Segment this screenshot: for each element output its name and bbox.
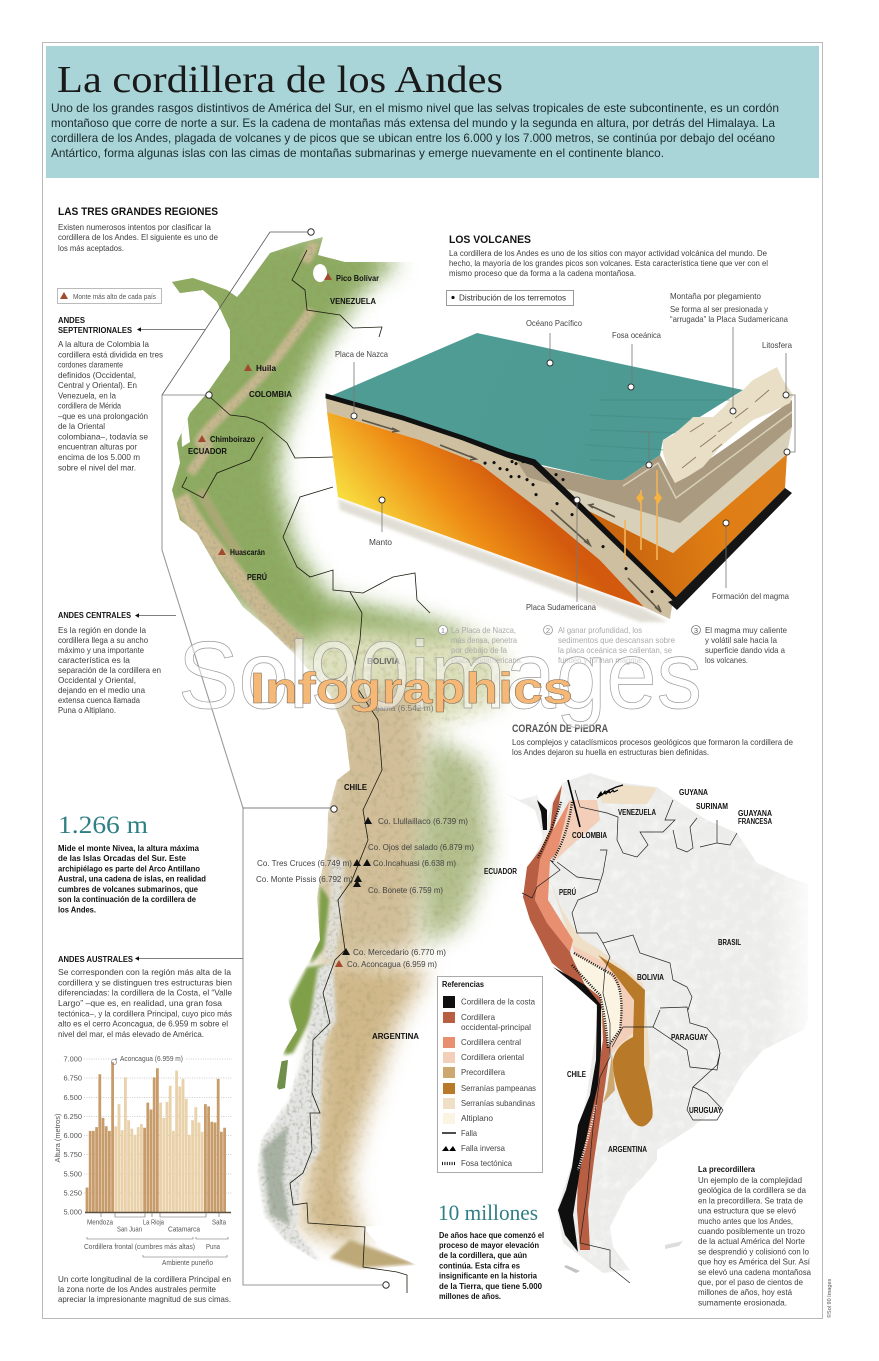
- diagram labels: Montaña por plegamiento: [670, 291, 761, 301]
- callout: 1.266 m: 1.266 m: [58, 812, 149, 839]
- text: andes centrales: Occidental y Oriental,: [58, 675, 136, 685]
- text: corazon de piedra: los Andes dejaron su huella en estructuras bien definidas.: [512, 747, 709, 757]
- text: andes australes: tectónica–, y la cordillera Principal, cuyo pico más: [58, 1008, 232, 1018]
- map labels and peaks: VENEZUELA: [330, 297, 376, 306]
- diagram labels: Se forma al ser presionada y: [670, 304, 769, 314]
- text: la precordillera: geológica de la cordillera se da: [698, 1185, 806, 1195]
- map labels and peaks: Co.Incahuasi (6.638 m): [373, 858, 456, 868]
- text: andes centrales: Puna o Altiplano.: [58, 705, 116, 715]
- connector brackets: [162, 229, 389, 1288]
- text: las tres grandes regiones: LAS TRES GRANDES REGIONES: [58, 206, 218, 218]
- text: andes australes: cordillera y se distinguen tres estructuras bien: [58, 977, 232, 987]
- map labels: ECUADOR: [484, 867, 517, 876]
- chart gridlines and axis labels: 6.000: [64, 1131, 82, 1140]
- block diagram: subduction: [326, 291, 795, 622]
- watermark: Sol90images: [178, 622, 702, 729]
- chart gridlines and axis labels: [53, 1054, 232, 1216]
- text: andes australes: diferenciadas: la cordillera de la Costa, el “Valle: [58, 988, 232, 998]
- note 3: superficie dando vida a: [705, 645, 785, 655]
- text: la precordillera: millones de años, hoy está: [698, 1287, 792, 1297]
- legend: referencias: Serranías pampeanas: [461, 1083, 536, 1093]
- legend: referencias: Cordillera central: [461, 1037, 521, 1047]
- map labels: FRANCESA: [738, 817, 772, 826]
- text: andes septentrionales: [58, 315, 205, 472]
- map labels and peaks: PERÚ: [247, 573, 267, 582]
- map labels and peaks: Co. Mercedario (6.770 m): [353, 947, 446, 957]
- earthquake dots: [483, 460, 654, 593]
- text: andes centrales: [58, 610, 176, 715]
- legend: earthquakes: Distribución de los terremotos: [459, 292, 566, 302]
- map labels and peaks: Co. Tres Cruces (6.749 m): [257, 858, 352, 868]
- legend: referencias: Precordillera: [461, 1067, 505, 1077]
- faults and trenches: [538, 780, 623, 1170]
- text: los volcanes: LOS VOLCANES: [449, 234, 531, 246]
- legend: referencias: Cordillera de la costa: [461, 996, 535, 1006]
- text: andes septentrionales: SEPTENTRIONALES: [58, 325, 132, 335]
- chart caption: apreciar la impresionante magnitud de sus cimas.: [58, 1294, 231, 1304]
- text: la precordillera: Un ejemplo de la complejidad: [698, 1175, 802, 1185]
- text: las tres grandes regiones: Existen numerosos intentos por clasificar la: [58, 222, 211, 232]
- text: las tres grandes regiones: [58, 206, 218, 253]
- plate arrows: [362, 420, 661, 612]
- text: andes centrales: Es la región en donde la: [58, 625, 146, 635]
- annotation: Aconcagua: Aconcagua (6.959 m): [120, 1054, 183, 1063]
- ocean surface: [326, 333, 743, 480]
- black subducting slab: [326, 394, 676, 600]
- map labels and peaks: Chimboirazo: [210, 435, 255, 444]
- chart region labels: San Juan: [117, 1224, 142, 1234]
- text: la precordillera: que, por el paso de cientos de: [698, 1277, 803, 1287]
- legend: referencias: [438, 976, 542, 1172]
- map labels: [484, 788, 772, 1154]
- text: andes australes: alto es el cerro Aconcagua, de 6.959 m sobre el: [58, 1019, 228, 1029]
- map: south america geology: [484, 773, 808, 1283]
- text: andes septentrionales: A la altura de Colombia la: [58, 339, 149, 349]
- callout: 10 millones: millones de años.: [439, 1291, 501, 1301]
- map labels: COLOMBIA: [572, 831, 607, 840]
- note 1: 1: [441, 626, 445, 635]
- text: andes septentrionales: ANDES: [58, 315, 85, 325]
- chart caption: la zona norte de los Andes australes permite: [58, 1284, 216, 1294]
- map labels: PERÚ: [559, 888, 576, 897]
- header panel: [46, 46, 819, 178]
- numbered notes: [438, 625, 787, 665]
- note 2: funden y forman magma.: [558, 655, 643, 665]
- text: andes septentrionales: cordones claramente: [58, 360, 123, 370]
- text: andes australes: nivel del mar, el más elevado de América.: [58, 1029, 204, 1039]
- chart gridlines and axis labels: Altura (metros): [53, 1114, 62, 1162]
- diagram shadow: [338, 499, 668, 622]
- credit: ©Sol 90 Images: [826, 1279, 833, 1318]
- text: andes septentrionales: sobre el nivel del mar.: [58, 462, 136, 472]
- text: los volcanes: La cordillera de los Andes es uno de los sitios con mayor actividad volcánica del mundo. De: [449, 248, 767, 258]
- text: andes septentrionales: de la Oriental: [58, 421, 105, 431]
- map labels: BRASIL: [718, 938, 741, 947]
- map labels and peaks: Co. Ojos del salado (6.879 m): [368, 842, 474, 852]
- diagram labels: Océano Pacífico: [526, 318, 582, 328]
- map labels and peaks: [188, 273, 474, 1041]
- text: andes centrales: cordillera llega a su ancho: [58, 635, 148, 645]
- text: las tres grandes regiones: los más aceptados.: [58, 243, 124, 253]
- andes spine: [190, 243, 315, 473]
- text: los volcanes: [449, 234, 768, 278]
- text: andes centrales: dejando en el medio una: [58, 685, 145, 695]
- note 2: [544, 625, 675, 665]
- text: andes septentrionales: –que es una prolongación: [58, 411, 148, 421]
- geology bands: [523, 785, 657, 1252]
- text: andes centrales: característica es la: [58, 655, 130, 665]
- text: andes centrales: ANDES CENTRALES: [58, 610, 131, 620]
- diagram labels: [335, 291, 792, 612]
- chart gridlines and axis labels: 5.000: [64, 1208, 82, 1216]
- legend: highest peak: [58, 288, 162, 304]
- chart caption: [58, 1274, 231, 1304]
- callout: 10 millones: de la Tierra, que tiene 5.000: [439, 1281, 542, 1291]
- nazca plate: [326, 398, 673, 619]
- text: la precordillera: [698, 1164, 811, 1307]
- callout: 10 millones: De años hace que comenzó el: [439, 1230, 544, 1240]
- legend: highest peak: Monte más alto de cada país: [73, 292, 156, 301]
- callout: 1.266 m: [58, 812, 206, 914]
- callout: 1.266 m: de las Islas Orcadas del Sur. Este: [58, 853, 186, 863]
- note 2: la placa oceánica se calientan, se: [558, 645, 672, 655]
- map labels and peaks: Sajama (6.542 m): [367, 703, 434, 713]
- chart region labels: Salta: [212, 1218, 227, 1226]
- annotation: Aconcagua: [111, 1054, 183, 1065]
- legend: referencias: Falla: [461, 1128, 477, 1138]
- callout: 1.266 m: cumbres de volcanes submarinos, que: [58, 884, 198, 894]
- magma chamber: [573, 454, 787, 600]
- chart region labels: Catamarca: [168, 1224, 201, 1234]
- map labels: GUAYANA: [738, 809, 772, 818]
- map labels and peaks: Co. Llullaillaco (6.739 m): [378, 816, 468, 826]
- mountains: [663, 367, 793, 483]
- chart gridlines and axis labels: 5.500: [64, 1170, 82, 1178]
- magma plumes: [625, 470, 662, 560]
- text: andes septentrionales: encuentran alturas por: [58, 442, 137, 452]
- callout: 1.266 m: Mide el monte Nivea, la altura máxima: [58, 843, 199, 853]
- intro text: Uno de los grandes rasgos distintivos de América del Sur, en el mismo nivel que las selvas tropicales de este subcontinente, es un cordón: [51, 101, 779, 115]
- map labels: URUGUAY: [689, 1106, 723, 1115]
- chart region labels: La Rioja: [143, 1218, 165, 1226]
- bar chart: peak heights: [53, 1054, 232, 1267]
- text: andes centrales: separación de la cordillera en: [58, 665, 161, 675]
- intro text: [51, 101, 779, 160]
- text: la precordillera: mucho antes que los Andes,: [698, 1216, 793, 1226]
- chart region labels: Ambiente puneño: [162, 1258, 213, 1267]
- callout: 10 millones: de la cordillera, que aún: [439, 1250, 527, 1260]
- text: corazon de piedra: CORAZÓN DE PIEDRA: [512, 722, 608, 735]
- text: andes septentrionales: Central y Oriental). En: [58, 380, 137, 390]
- map labels: SURINAM: [696, 802, 728, 811]
- mantle: [327, 412, 644, 607]
- cream lithosphere: [527, 427, 792, 553]
- diagram labels: Placa Sudamericana: [526, 602, 596, 612]
- text: las tres grandes regiones: cordillera de los Andes. El siguiente es uno de: [58, 232, 218, 242]
- note 2: sedimentos que descansan sobre: [558, 635, 675, 645]
- map labels and peaks: Huila: [256, 364, 277, 373]
- text: la precordillera: se elevó una cadena montañosa: [698, 1267, 811, 1277]
- text: andes australes: Largo” –que es, en realidad, una gran fosa: [58, 998, 222, 1008]
- bars: [85, 1062, 231, 1212]
- intro text: Antártico, forma algunas islas con las cimas de montañas submarinas y emerge nuevamente en el continente blanco.: [51, 146, 664, 160]
- text: andes septentrionales: definidos (Occidental,: [58, 370, 136, 380]
- map labels and peaks: Co. Monte Pissis (6.792 m): [256, 874, 353, 884]
- callout: 1.266 m: los Andes.: [58, 904, 96, 914]
- text: la precordillera: que hoy es América del Sur. Así: [698, 1257, 811, 1267]
- diagram labels: “arrugada” la Placa Sudamericana: [670, 314, 788, 324]
- text: andes septentrionales: colombiana–, todavía se: [58, 431, 148, 441]
- legend: referencias: Referencias: [442, 979, 484, 989]
- callout: 1.266 m: archipiélago es parte del Arco Antillano: [58, 864, 200, 874]
- note 1: por debajo de la: [451, 645, 507, 655]
- text: andes septentrionales: Venezuela, en la: [58, 390, 116, 400]
- callout: 10 millones: continúa. Esta cifra es: [439, 1260, 520, 1270]
- text: andes septentrionales: encima de los 5.000 m: [58, 452, 140, 462]
- legend: referencias: Serranías subandinas: [461, 1098, 535, 1108]
- tan sediment layer: [517, 400, 792, 523]
- diagram labels: Formación del magma: [712, 591, 789, 601]
- map labels and peaks: ECUADOR: [188, 447, 227, 456]
- diagram labels: Placa de Nazca: [335, 349, 388, 359]
- text: la precordillera: se desprendió y colisionó con lo: [698, 1246, 809, 1256]
- note 3: y volátil sale hacia la: [705, 635, 777, 645]
- map labels and peaks: Co. Aconcagua (6.959 m): [347, 959, 437, 969]
- text: la precordillera: La precordillera: [698, 1164, 755, 1174]
- map labels: PARAGUAY: [671, 1033, 709, 1042]
- text: corazon de piedra: [512, 722, 793, 757]
- text: corazon de piedra: Los complejos y cataclísmicos procesos geológicos que formaron la cordillera de: [512, 737, 793, 747]
- intro text: cordillera de los Andes, plagada de volcanes y de picos que se ubican entre los 6.000 y los 7.000 metros, se continúa por debajo del océano: [51, 131, 775, 145]
- note 3: 3: [694, 626, 698, 635]
- text: la precordillera: de la actual América del Norte: [698, 1236, 805, 1246]
- chart region labels: Mendoza: [87, 1218, 114, 1226]
- legend: referencias: Falla inversa: [461, 1143, 505, 1153]
- chart gridlines and axis labels: 5.250: [64, 1188, 82, 1198]
- note 1: [438, 625, 523, 665]
- map labels: VENEZUELA: [618, 808, 656, 817]
- chart region labels: Cordillera frontal (cumbres más altas): [84, 1242, 195, 1251]
- text: la precordillera: cuando posiblemente un trozo: [698, 1226, 805, 1236]
- callout: 10 millones: insignificante en la historia: [439, 1270, 537, 1280]
- diagram labels: Fosa oceánica: [612, 330, 661, 340]
- political borders: [522, 790, 737, 1283]
- map labels: ARGENTINA: [608, 1145, 647, 1154]
- map labels and peaks: CHILE: [344, 783, 368, 792]
- note 1: más densa, penetra: [451, 635, 517, 645]
- text: los volcanes: mismo proceso que da forma a la cadena montañosa.: [449, 268, 636, 278]
- legend: referencias: Fosa tectónica: [461, 1158, 512, 1168]
- legend: referencias: occidental-principal: [461, 1022, 531, 1032]
- chart region labels: Puna: [206, 1242, 221, 1251]
- chart gridlines and axis labels: 6.250: [64, 1112, 82, 1121]
- text: la precordillera: una estructura que se elevó: [698, 1206, 796, 1216]
- chart gridlines and axis labels: 5.750: [64, 1150, 82, 1159]
- note 2: Al ganar profundidad, los: [558, 625, 642, 635]
- text: andes septentrionales: cordillera de Mérida: [58, 401, 121, 411]
- chart caption: Un corte longitudinal de la cordillera Principal en: [58, 1274, 231, 1284]
- callout: 10 millones: [438, 1200, 544, 1301]
- map labels and peaks: Co. Bonete (6.759 m): [368, 885, 443, 895]
- map: Andes relief: [150, 230, 505, 1293]
- note 2: 2: [546, 626, 550, 635]
- intro text: montañoso que corre de norte a sur. Es la cadena de montañas más extensa del mundo y la segunda en altura, por detrás del Himalaya. La: [51, 116, 775, 130]
- watermark: Infographics: [250, 664, 573, 713]
- callout: 10 millones: proceso de mayor elevación: [439, 1240, 539, 1250]
- text: la precordillera: en la precordillera. Se trata de: [698, 1195, 803, 1205]
- note 1: Placa Sudamericana.: [451, 655, 523, 665]
- text: la precordillera: sumamente erosionada.: [698, 1297, 787, 1307]
- diagram labels: Manto: [369, 537, 392, 547]
- chart gridlines and axis labels: 6.750: [64, 1074, 82, 1082]
- diagram leaders and nodes: [351, 327, 795, 602]
- callout: 10 millones: 10 millones: [438, 1200, 538, 1225]
- note 3: [692, 625, 787, 665]
- map labels: CHILE: [567, 1070, 587, 1079]
- text: andes centrales: extensa cuenca llamada: [58, 695, 140, 705]
- chart region labels: [84, 1212, 228, 1267]
- text: andes centrales: máximo y una importante: [58, 645, 144, 655]
- text: los volcanes: hecho, la mayoría de los grandes picos son volcanes. Esta característica tiene que ver con el: [449, 258, 768, 268]
- text: andes septentrionales: cordillera está dividida en tres: [58, 349, 163, 359]
- map labels and peaks: Pico Bolívar: [336, 274, 379, 283]
- map labels and peaks: BOLIVIA: [367, 657, 400, 666]
- diagram labels: Litosfera: [762, 340, 792, 350]
- text: andes australes: Se corresponden con la región más alta de la: [58, 967, 231, 977]
- title: La cordillera de los Andes: [57, 59, 503, 101]
- chart gridlines and axis labels: 7.000: [64, 1054, 82, 1064]
- text: andes australes: ANDES AUSTRALES: [58, 954, 133, 964]
- map labels: GUYANA: [679, 788, 708, 797]
- note 3: los volcanes.: [705, 655, 748, 665]
- legend: earthquakes: [446, 290, 574, 306]
- map labels and peaks: ARGENTINA: [372, 1032, 419, 1041]
- map labels and peaks: COLOMBIA: [249, 390, 292, 399]
- legend: referencias: Altiplano: [461, 1113, 493, 1123]
- land: [505, 773, 808, 1273]
- note 3: El magma muy caliente: [705, 625, 787, 635]
- map labels and peaks: Huascarán: [230, 548, 265, 557]
- chart gridlines and axis labels: 6.500: [64, 1093, 82, 1102]
- callout: 1.266 m: Austral, una cadena de islas, en realidad: [58, 874, 206, 884]
- legend: referencias: Cordillera oriental: [461, 1052, 524, 1062]
- callout: 1.266 m: son la continuación de la cordillera de: [58, 894, 196, 904]
- country borders: [182, 250, 430, 1293]
- legend: referencias: Cordillera: [461, 1012, 495, 1022]
- text: andes australes: [58, 954, 243, 1039]
- note 1: La Placa de Nazca,: [451, 625, 516, 635]
- map labels: BOLIVIA: [637, 973, 664, 982]
